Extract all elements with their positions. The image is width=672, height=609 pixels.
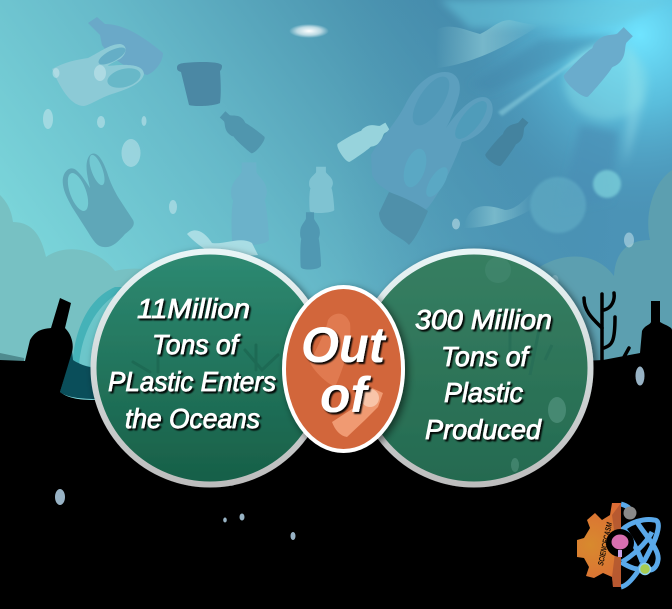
bottle pale [309,167,334,213]
seabed bubbles [55,366,644,540]
brain icon [606,529,634,557]
text: 300 million tons of plastic produced [415,304,552,445]
faint coral and bubbles inside right circle [485,257,566,472]
earth [640,564,650,574]
plastic wisp lower right [464,192,532,228]
background: ocean water [0,0,672,400]
bottle dark right [484,114,533,168]
text: out of: of [320,367,371,423]
surface fish glint [289,24,329,38]
faint coral inside left circle [133,345,278,372]
plastic wrap pale [187,230,258,258]
text: 11 million tons of plastic enters the oceans [108,293,276,434]
text: out of: Out [301,317,387,373]
moon [624,506,636,520]
bottle dark [300,212,321,270]
plastic cup [177,62,222,106]
bottle dark small [216,106,267,155]
clouds / seabed foliage left [0,195,185,362]
text: 11 million tons of plastic enters the oceans: 11Million [137,293,250,324]
centre oval: out of [284,287,403,451]
text: 300 million tons of plastic produced: Plastic [444,377,523,408]
large plastic bag [371,71,493,245]
plastic bottle blue top left [88,17,163,75]
gear half [577,503,621,587]
text: 11 million tons of plastic enters the oceans: Tons of [152,329,241,360]
bottle blue centre [231,162,269,245]
teal bottle behind left circle [0,287,135,399]
plastic wisp top right [436,20,540,68]
silhouette: coral right [584,293,629,361]
glowing bubbles right [530,170,621,233]
text: 11 million tons of plastic enters the oceans: PLastic Enters [108,366,276,397]
atom orbits [621,504,658,587]
right circle: 300 million tons [358,252,590,484]
thin light ray [498,25,625,116]
light rays [440,0,672,210]
bottle pale small right [335,117,393,164]
bottle blue top right [561,21,641,100]
text: 300 million tons of plastic produced: Tons of [441,341,531,372]
clouds / seabed foliage right [520,170,672,362]
text: 11 million tons of plastic enters the oceans: the Oceans [125,403,260,434]
faint plastic shapes in oval [310,314,383,437]
text: 300 million tons of plastic produced: Produced [425,414,542,445]
logo: sciencecasm gear and atom [577,503,658,587]
left circle: 11 million tons [94,252,326,484]
text: 300 million tons of plastic produced: 300 Million [415,304,552,335]
logo wordmark: SCIENCECASM [596,521,614,566]
plastic bag pale top left [52,44,144,106]
text: out of [301,317,387,423]
silhouette: black seabed [0,298,672,609]
plastic bag dark left [63,153,134,247]
bubbles [43,65,634,285]
